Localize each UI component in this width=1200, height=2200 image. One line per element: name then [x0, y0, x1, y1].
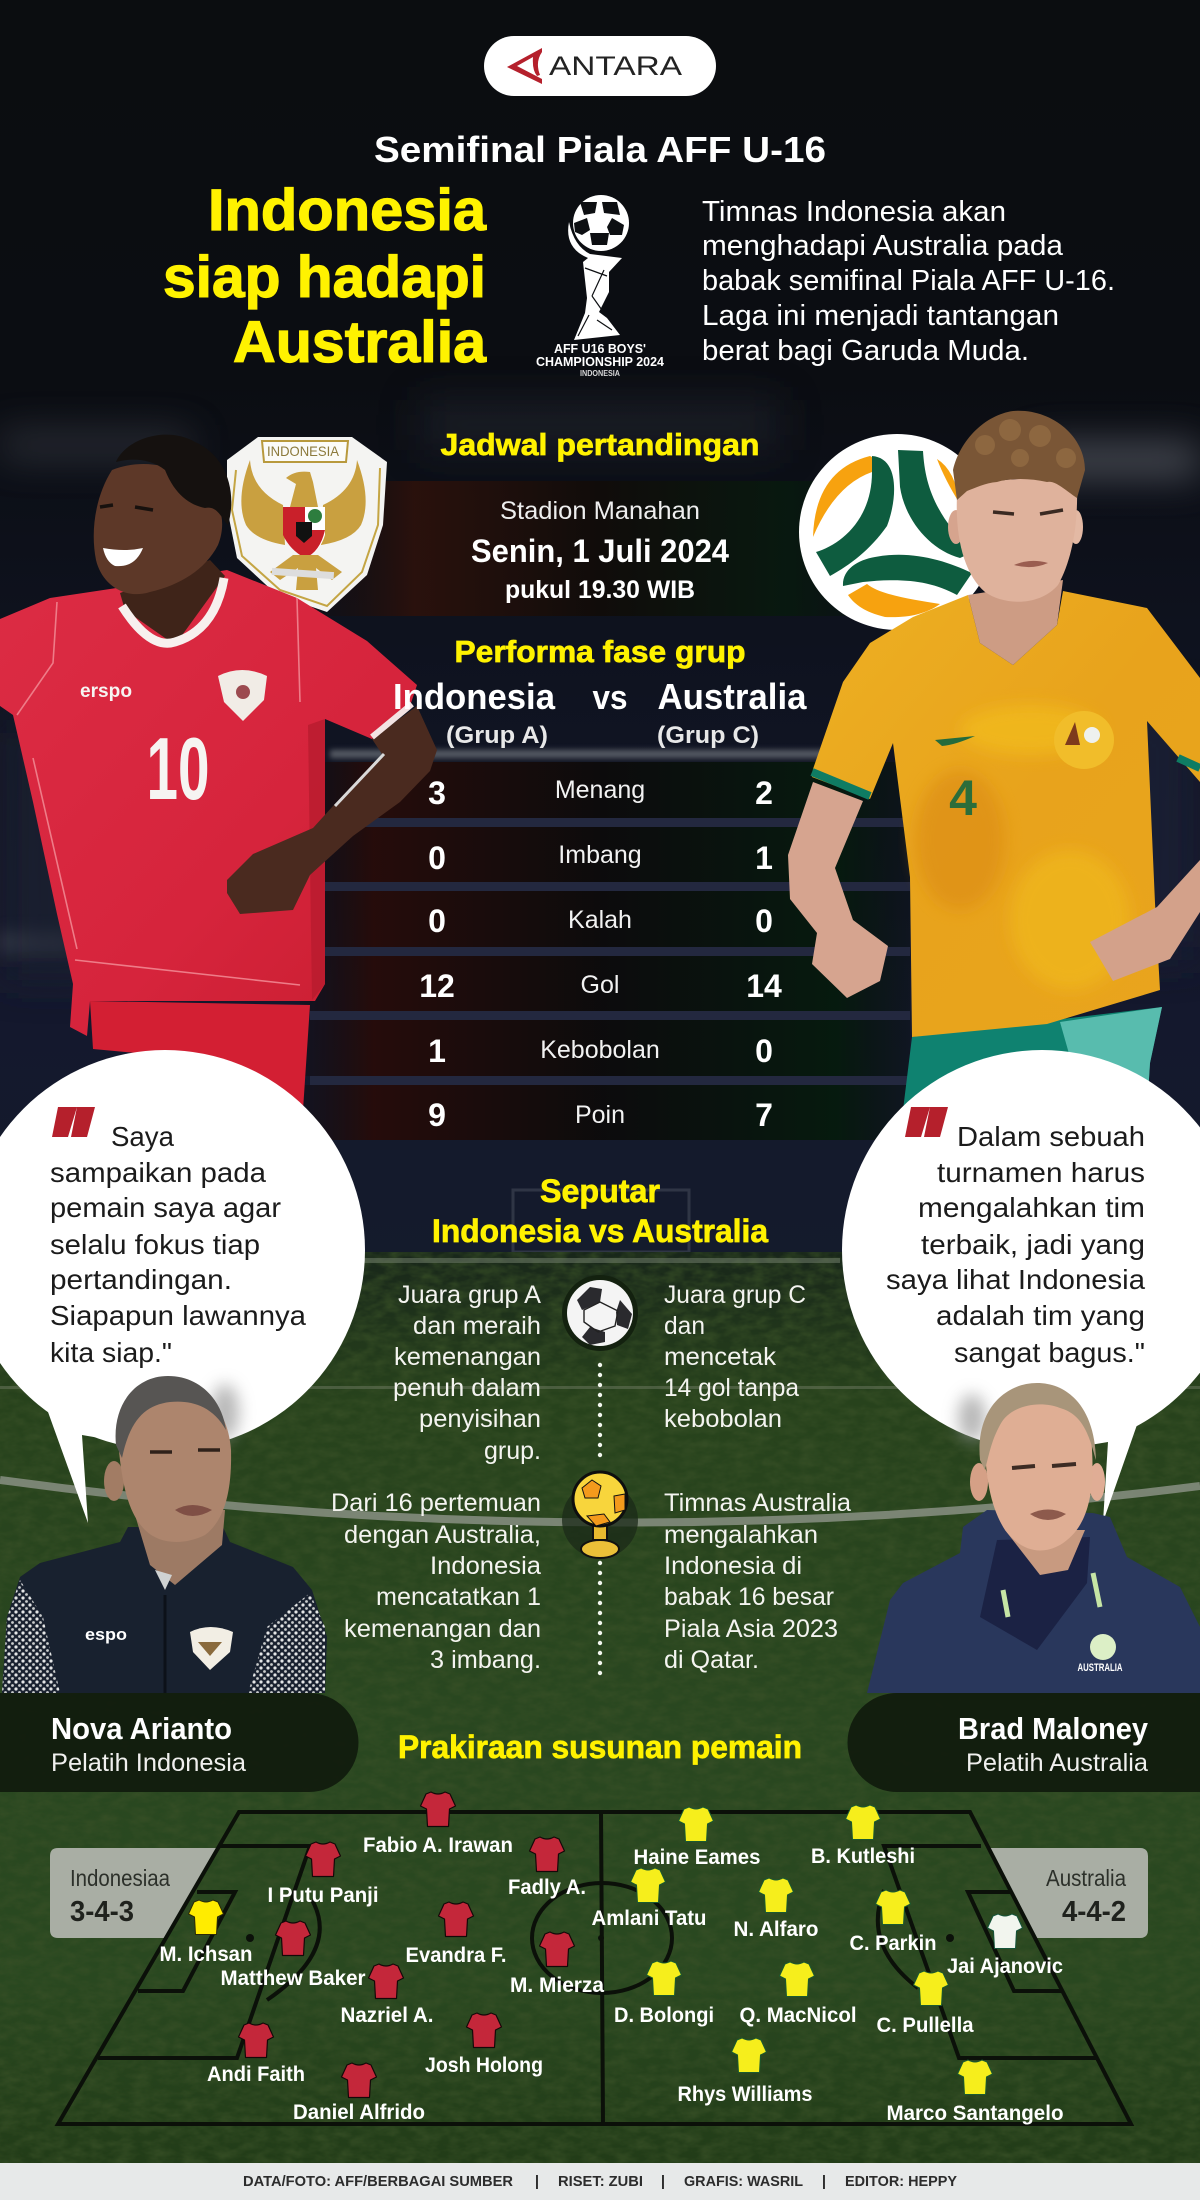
text: Australia group fact: 14 gol tanpa — [664, 1374, 799, 1402]
footer: credits: EDITOR: HEPPY — [845, 2173, 957, 2190]
intro paragraph: menghadapi Australia pada — [702, 230, 1064, 262]
lineup: Indonesia players — [160, 1792, 604, 2124]
panel: Brad Maloney name plate: Pelatih Australia — [966, 1749, 1148, 1777]
panel: Brad Maloney name plate: Brad Maloney — [958, 1711, 1149, 1746]
callout: Australia coach quote: terbaik, jadi yang — [921, 1229, 1145, 1260]
heading: main title: siap hadapi — [163, 245, 486, 310]
player: Matthew Baker: Matthew Baker — [220, 1967, 366, 1990]
footer: credits: | — [535, 2173, 539, 2190]
callout: Indonesia coach quote: sampaikan pada — [50, 1157, 266, 1188]
text: Australia group fact: Juara grup C — [664, 1281, 806, 1309]
heading: Performa fase grup: Performa fase grup — [454, 634, 746, 669]
text: Indonesia group fact: penuh dalam — [393, 1374, 541, 1402]
callout: Australia coach quote: Dalam sebuah — [957, 1121, 1145, 1152]
row: Menang — [428, 775, 773, 811]
player: Evandra F.: Evandra F. — [406, 1944, 506, 1967]
player: M. Mierza — [510, 1932, 604, 1997]
panel: match schedule — [290, 481, 910, 616]
text: head-to-head Indonesia: mencatatkan 1 — [376, 1583, 541, 1611]
icon: Indonesia emblem — [227, 437, 387, 612]
player: I Putu Panji: I Putu Panji — [268, 1884, 378, 1907]
person: Brad Maloney — [867, 1383, 1200, 1693]
footer: credits: | — [661, 2173, 665, 2190]
row: Imbang — [428, 840, 773, 876]
intro paragraph — [702, 196, 1115, 367]
lineup: Australia players — [592, 1805, 1064, 2125]
player: C. Pullella — [876, 1971, 974, 2037]
player: B. Kutleshi: B. Kutleshi — [811, 1845, 915, 1868]
player: Rhys Williams: Rhys Williams — [678, 2083, 812, 2106]
player: Nazriel A.: Nazriel A. — [340, 2004, 434, 2027]
row: Gol — [419, 968, 782, 1004]
callout: Indonesia coach quote — [0, 1050, 365, 1523]
player: Q. MacNicol — [740, 1962, 856, 2027]
player: D. Bolongi: D. Bolongi — [614, 2004, 714, 2027]
callout: Indonesia coach quote: Siapapun lawannya — [50, 1300, 306, 1331]
row: Poin: Poin — [575, 1101, 625, 1129]
row: Poin — [428, 1097, 773, 1133]
text: head-to-head Australia: mengalahkan — [664, 1521, 818, 1549]
player: C. Parkin: C. Parkin — [850, 1932, 936, 1955]
panel: Indonesia formation: Indonesiaa — [70, 1865, 170, 1891]
intro paragraph: Laga ini menjadi tantangan — [702, 300, 1059, 332]
panel: match schedule: Senin, 1 Juli 2024 — [471, 533, 729, 569]
player: Fabio A. Irawan: Fabio A. Irawan — [363, 1834, 513, 1857]
player: N. Alfaro — [734, 1878, 818, 1941]
player: Amlani Tatu: Amlani Tatu — [592, 1907, 706, 1930]
table header: vs — [592, 679, 628, 717]
player: D. Bolongi — [614, 1961, 714, 2027]
panel: Australia formation: 4-4-2 — [1062, 1896, 1126, 1928]
table header — [393, 676, 807, 749]
player: Indonesia number 10: 10 — [146, 719, 210, 818]
icon: AFF U16 trophy logo: INDONESIA — [580, 369, 620, 378]
row: Kebobolan — [428, 1033, 773, 1069]
player: Indonesia number 10: erspo — [80, 681, 132, 702]
panel: Nova Arianto name plate — [0, 1693, 358, 1792]
player: Andi Faith — [207, 2023, 305, 2086]
player: Fadly A. — [508, 1837, 586, 1899]
text: Australia group fact: kebobolan — [664, 1405, 782, 1433]
text: Indonesia group fact: penyisihan — [419, 1405, 541, 1433]
text: head-to-head Australia: di Qatar. — [664, 1646, 759, 1674]
table: group stage rows — [419, 775, 782, 1133]
player: C. Parkin — [850, 1890, 936, 1955]
text: head-to-head Indonesia: Indonesia — [430, 1552, 541, 1580]
text: head-to-head Australia: Piala Asia 2023 — [664, 1615, 838, 1643]
callout: Indonesia coach quote: pemain saya agar — [50, 1192, 281, 1223]
callout: Australia coach quote: mengalahkan tim — [918, 1192, 1145, 1223]
footer: credits — [0, 2163, 1200, 2200]
icon: Football Australia logo — [799, 434, 995, 630]
panel: Nova Arianto name plate: Nova Arianto — [51, 1711, 232, 1746]
row: Menang: Menang — [555, 776, 645, 804]
row: Imbang: 1 — [755, 840, 773, 876]
player: Andi Faith: Andi Faith — [207, 2063, 305, 2086]
panel: group stage table background — [300, 750, 910, 1140]
row: Kalah: 0 — [428, 903, 446, 939]
callout: Indonesia coach quote: selalu fokus tiap — [50, 1229, 260, 1260]
player: Josh Holong: Josh Holong — [425, 2054, 543, 2077]
text: Indonesia group fact: dan meraih — [413, 1312, 541, 1340]
player: Fadly A.: Fadly A. — [508, 1876, 586, 1899]
row: Kalah: Kalah — [568, 906, 632, 934]
text: head-to-head Indonesia: 3 imbang. — [430, 1646, 541, 1674]
player: Rhys Williams — [678, 2038, 812, 2106]
heading: Jadwal pertandingan: Jadwal pertandingan — [440, 427, 760, 462]
panel: match schedule: pukul 19.30 WIB — [505, 576, 695, 604]
text: Indonesia group fact: Juara grup A — [398, 1281, 541, 1309]
panel: Australia formation: Australia — [1046, 1865, 1126, 1891]
text: Australia group fact: mencetak — [664, 1343, 777, 1371]
heading: main title — [163, 178, 487, 375]
callout: Indonesia coach quote: kita siap." — [50, 1337, 172, 1368]
text: head-to-head Indonesia: Dari 16 pertemuan — [331, 1489, 541, 1517]
text: head-to-head Australia: babak 16 besar — [664, 1583, 834, 1611]
person: Brad Maloney: AUSTRALIA — [1078, 1662, 1123, 1674]
text: head-to-head Indonesia: kemenangan dan — [344, 1615, 541, 1643]
player: Australia number 4 — [788, 411, 1200, 1110]
table header: Indonesia — [393, 676, 556, 717]
dotted connector 1 — [598, 1363, 602, 1457]
row: Poin: 9 — [428, 1097, 446, 1133]
row: Imbang: 0 — [428, 840, 446, 876]
player: Nazriel A. — [340, 1964, 434, 2027]
player: I Putu Panji — [268, 1842, 378, 1907]
row: Kebobolan: Kebobolan — [540, 1036, 660, 1064]
row: Gol: Gol — [581, 971, 619, 999]
player: Marco Santangelo: Marco Santangelo — [886, 2102, 1064, 2125]
player: Daniel Alfrido: Daniel Alfrido — [293, 2101, 425, 2124]
callout: Australia coach quote: turnamen harus — [937, 1157, 1145, 1188]
heading: main title: Australia — [233, 310, 487, 375]
footer: credits: RISET: ZUBI — [558, 2173, 643, 2190]
player: Haine Eames — [634, 1807, 760, 1869]
footer: credits: GRAFIS: WASRIL — [684, 2173, 803, 2190]
intro paragraph: babak semifinal Piala AFF U-16. — [702, 265, 1115, 297]
player: Indonesia number 10 — [0, 435, 437, 1110]
callout: Australia coach quote: adalah tim yang — [936, 1300, 1145, 1331]
intro paragraph: berat bagi Garuda Muda. — [702, 335, 1029, 367]
player: M. Mierza: M. Mierza — [510, 1974, 604, 1997]
panel: Indonesia formation: 3-4-3 — [70, 1896, 134, 1928]
text: Indonesia group fact — [393, 1281, 541, 1465]
logo: ANTARA pill: ANTARA — [549, 51, 682, 81]
icon: Indonesia emblem: INDONESIA — [267, 443, 340, 459]
callout: Indonesia coach quote: Saya — [111, 1121, 174, 1152]
callout: Australia coach quote: sangat bagus." — [954, 1337, 1145, 1368]
panel: Nova Arianto name plate: Pelatih Indonesia — [51, 1749, 246, 1777]
row: Kalah: 0 — [755, 903, 773, 939]
player: Australia number 4: 4 — [949, 770, 977, 826]
heading: Seputar Indonesia vs Australia: Indonesia vs Australia — [432, 1213, 768, 1249]
footer: credits: | — [822, 2173, 826, 2190]
row: Gol: 12 — [419, 968, 455, 1004]
icon: AFF U16 trophy logo — [536, 195, 664, 378]
panel: Brad Maloney name plate — [848, 1693, 1200, 1792]
text: head-to-head Australia: Timnas Australia — [664, 1489, 851, 1517]
table header: Australia — [658, 676, 807, 717]
intro paragraph: Timnas Indonesia akan — [702, 196, 1006, 228]
row: Kebobolan: 0 — [755, 1033, 773, 1069]
player: B. Kutleshi — [811, 1805, 915, 1868]
player: Q. MacNicol: Q. MacNicol — [740, 2004, 856, 2027]
row: Imbang: Imbang — [558, 841, 642, 869]
text: head-to-head Indonesia: dengan Australia, — [344, 1521, 541, 1549]
panel: Indonesia formation — [50, 1848, 218, 1938]
row: Kalah — [428, 903, 773, 939]
player: Jai Ajanovic: Jai Ajanovic — [947, 1955, 1063, 1978]
dotted connector 2 — [598, 1561, 602, 1675]
person: Nova Arianto: espo — [85, 1625, 127, 1644]
panel: match schedule: Stadion Manahan — [500, 497, 700, 525]
icon: AFF U16 trophy logo: AFF U16 BOYS' — [554, 342, 646, 356]
heading: Prakiraan susunan pemain: Prakiraan susunan pemain — [398, 1729, 802, 1765]
chart: pitch lines — [58, 1812, 1131, 2124]
text: head-to-head Indonesia — [331, 1489, 541, 1674]
player: Jai Ajanovic — [947, 1914, 1063, 1978]
text: head-to-head Australia: Indonesia di — [664, 1552, 802, 1580]
table header: (Grup C) — [657, 722, 759, 749]
row: Menang: 3 — [428, 775, 446, 811]
table header: (Grup A) — [446, 722, 548, 749]
row: Gol: 14 — [746, 968, 782, 1004]
player: Haine Eames: Haine Eames — [634, 1846, 760, 1869]
callout: Australia coach quote: saya lihat Indonesia — [886, 1264, 1145, 1295]
text: head-to-head Australia — [664, 1489, 851, 1674]
person: Nova Arianto — [2, 1376, 327, 1693]
player: Matthew Baker — [220, 1921, 366, 1990]
panel: Australia formation — [989, 1848, 1148, 1938]
callout: Australia coach quote — [842, 1050, 1200, 1522]
player: M. Ichsan: M. Ichsan — [160, 1943, 252, 1966]
heading: main title: Indonesia — [208, 178, 487, 243]
row: Kebobolan: 1 — [428, 1033, 446, 1069]
player: N. Alfaro: N. Alfaro — [734, 1918, 818, 1941]
row: Poin: 7 — [755, 1097, 773, 1133]
callout: Indonesia coach quote: pertandingan. — [50, 1264, 232, 1295]
text: Indonesia group fact: kemenangan — [394, 1343, 541, 1371]
text: Australia group fact: dan — [664, 1312, 705, 1340]
player: Marco Santangelo — [886, 2060, 1064, 2125]
heading: kicker: Semifinal Piala AFF U-16 — [374, 129, 826, 170]
heading: Seputar Indonesia vs Australia: Seputar — [540, 1173, 660, 1209]
icon: golden ball trophy — [562, 1472, 638, 1558]
icon: AFF U16 trophy logo: CHAMPIONSHIP 2024 — [536, 355, 664, 369]
logo: ANTARA pill — [484, 36, 716, 96]
player: C. Pullella: C. Pullella — [876, 2014, 974, 2037]
heading: Seputar Indonesia vs Australia — [432, 1173, 768, 1249]
row: Menang: 2 — [755, 775, 773, 811]
player: M. Ichsan — [160, 1900, 252, 1966]
player: Evandra F. — [406, 1902, 506, 1967]
player: Amlani Tatu — [592, 1868, 706, 1930]
player: Fabio A. Irawan — [363, 1792, 513, 1857]
text: Australia group fact — [664, 1281, 806, 1433]
icon: soccer ball — [562, 1275, 638, 1351]
footer: credits: DATA/FOTO: AFF/BERBAGAI SUMBER — [243, 2173, 513, 2190]
player: Daniel Alfrido — [293, 2063, 425, 2124]
player: Josh Holong — [425, 2013, 543, 2077]
text: Indonesia group fact: grup. — [484, 1437, 541, 1465]
